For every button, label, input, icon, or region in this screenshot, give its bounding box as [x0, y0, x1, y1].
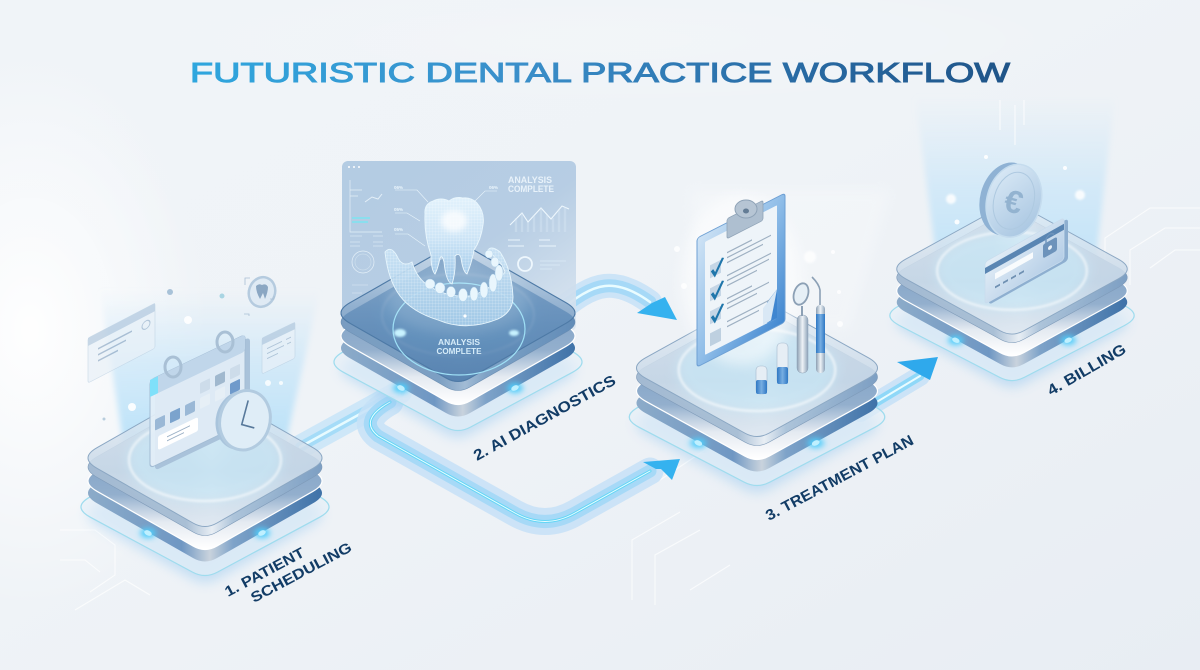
beam: patient scheduling — [100, 290, 320, 455]
icon: dental probe — [812, 277, 825, 373]
arrow: scheduling to diagnostics — [300, 392, 400, 447]
label: 2. AI diagnostics: 2. AI DIAGNOSTICS — [471, 372, 619, 464]
jaw model — [385, 248, 513, 326]
screen heading — [508, 175, 554, 194]
particles: scheduling — [102, 289, 283, 420]
icon: vial small — [756, 366, 767, 394]
icon: dental mirror — [791, 281, 811, 373]
arrow: diagnostics to treatment plan, upper route — [555, 286, 677, 320]
platform 3: treatment plan — [629, 300, 885, 492]
tooth callouts — [395, 190, 497, 246]
screen heading: ANALYSIS — [508, 175, 552, 185]
platform 4: billing — [890, 204, 1134, 387]
icon: coin: € — [1000, 182, 1027, 221]
title: FUTURISTIC DENTAL PRACTICE WORKFLOW — [190, 57, 1011, 88]
panel: AI analysis screen: 06% — [489, 185, 498, 190]
floating window: left — [88, 303, 155, 383]
icon: coin — [971, 156, 1050, 244]
platform text: analysis complete: COMPLETE — [436, 347, 482, 356]
floating window: right — [262, 322, 295, 374]
label: 3. treatment plan: 3. TREATMENT PLAN — [763, 432, 917, 525]
platform text: analysis complete: ANALYSIS — [438, 338, 481, 347]
platform 2: AI diagnostics — [334, 244, 582, 438]
line chart on screen — [508, 206, 569, 271]
icon: credit card — [985, 216, 1068, 307]
screen heading: COMPLETE — [508, 184, 554, 194]
label: 1. patient scheduling: 1. PATIENT — [222, 545, 308, 601]
panel: AI analysis screen: 05% — [394, 227, 403, 232]
arrow: treatment plan to billing — [860, 357, 938, 412]
label: 1. patient scheduling — [222, 540, 355, 607]
particles: billing — [946, 100, 1085, 224]
icon: vial tall — [777, 343, 788, 384]
panel: AI analysis screen: 05% — [394, 207, 403, 212]
beam: billing — [915, 95, 1115, 310]
platform 1: patient scheduling — [81, 390, 329, 582]
icon: dental hologram — [385, 197, 528, 334]
icon: calendar — [150, 332, 250, 473]
panel: AI analysis screen — [342, 161, 576, 331]
platform text: analysis complete — [436, 338, 482, 356]
arrow: diagnostics to treatment plan, lower route — [370, 402, 680, 522]
label: 4. billing: 4. BILLING — [1044, 341, 1129, 399]
particles: clipboard — [674, 246, 843, 327]
panel: AI analysis screen: 06% — [394, 185, 403, 190]
icon: tooth badge — [244, 273, 279, 316]
tooth model — [425, 197, 483, 284]
left mini chart — [350, 180, 383, 301]
beam: treatment plan — [690, 190, 890, 330]
icon: clock — [209, 384, 277, 457]
label: 1. patient scheduling: SCHEDULING — [248, 540, 355, 607]
icon: clipboard — [681, 189, 801, 367]
